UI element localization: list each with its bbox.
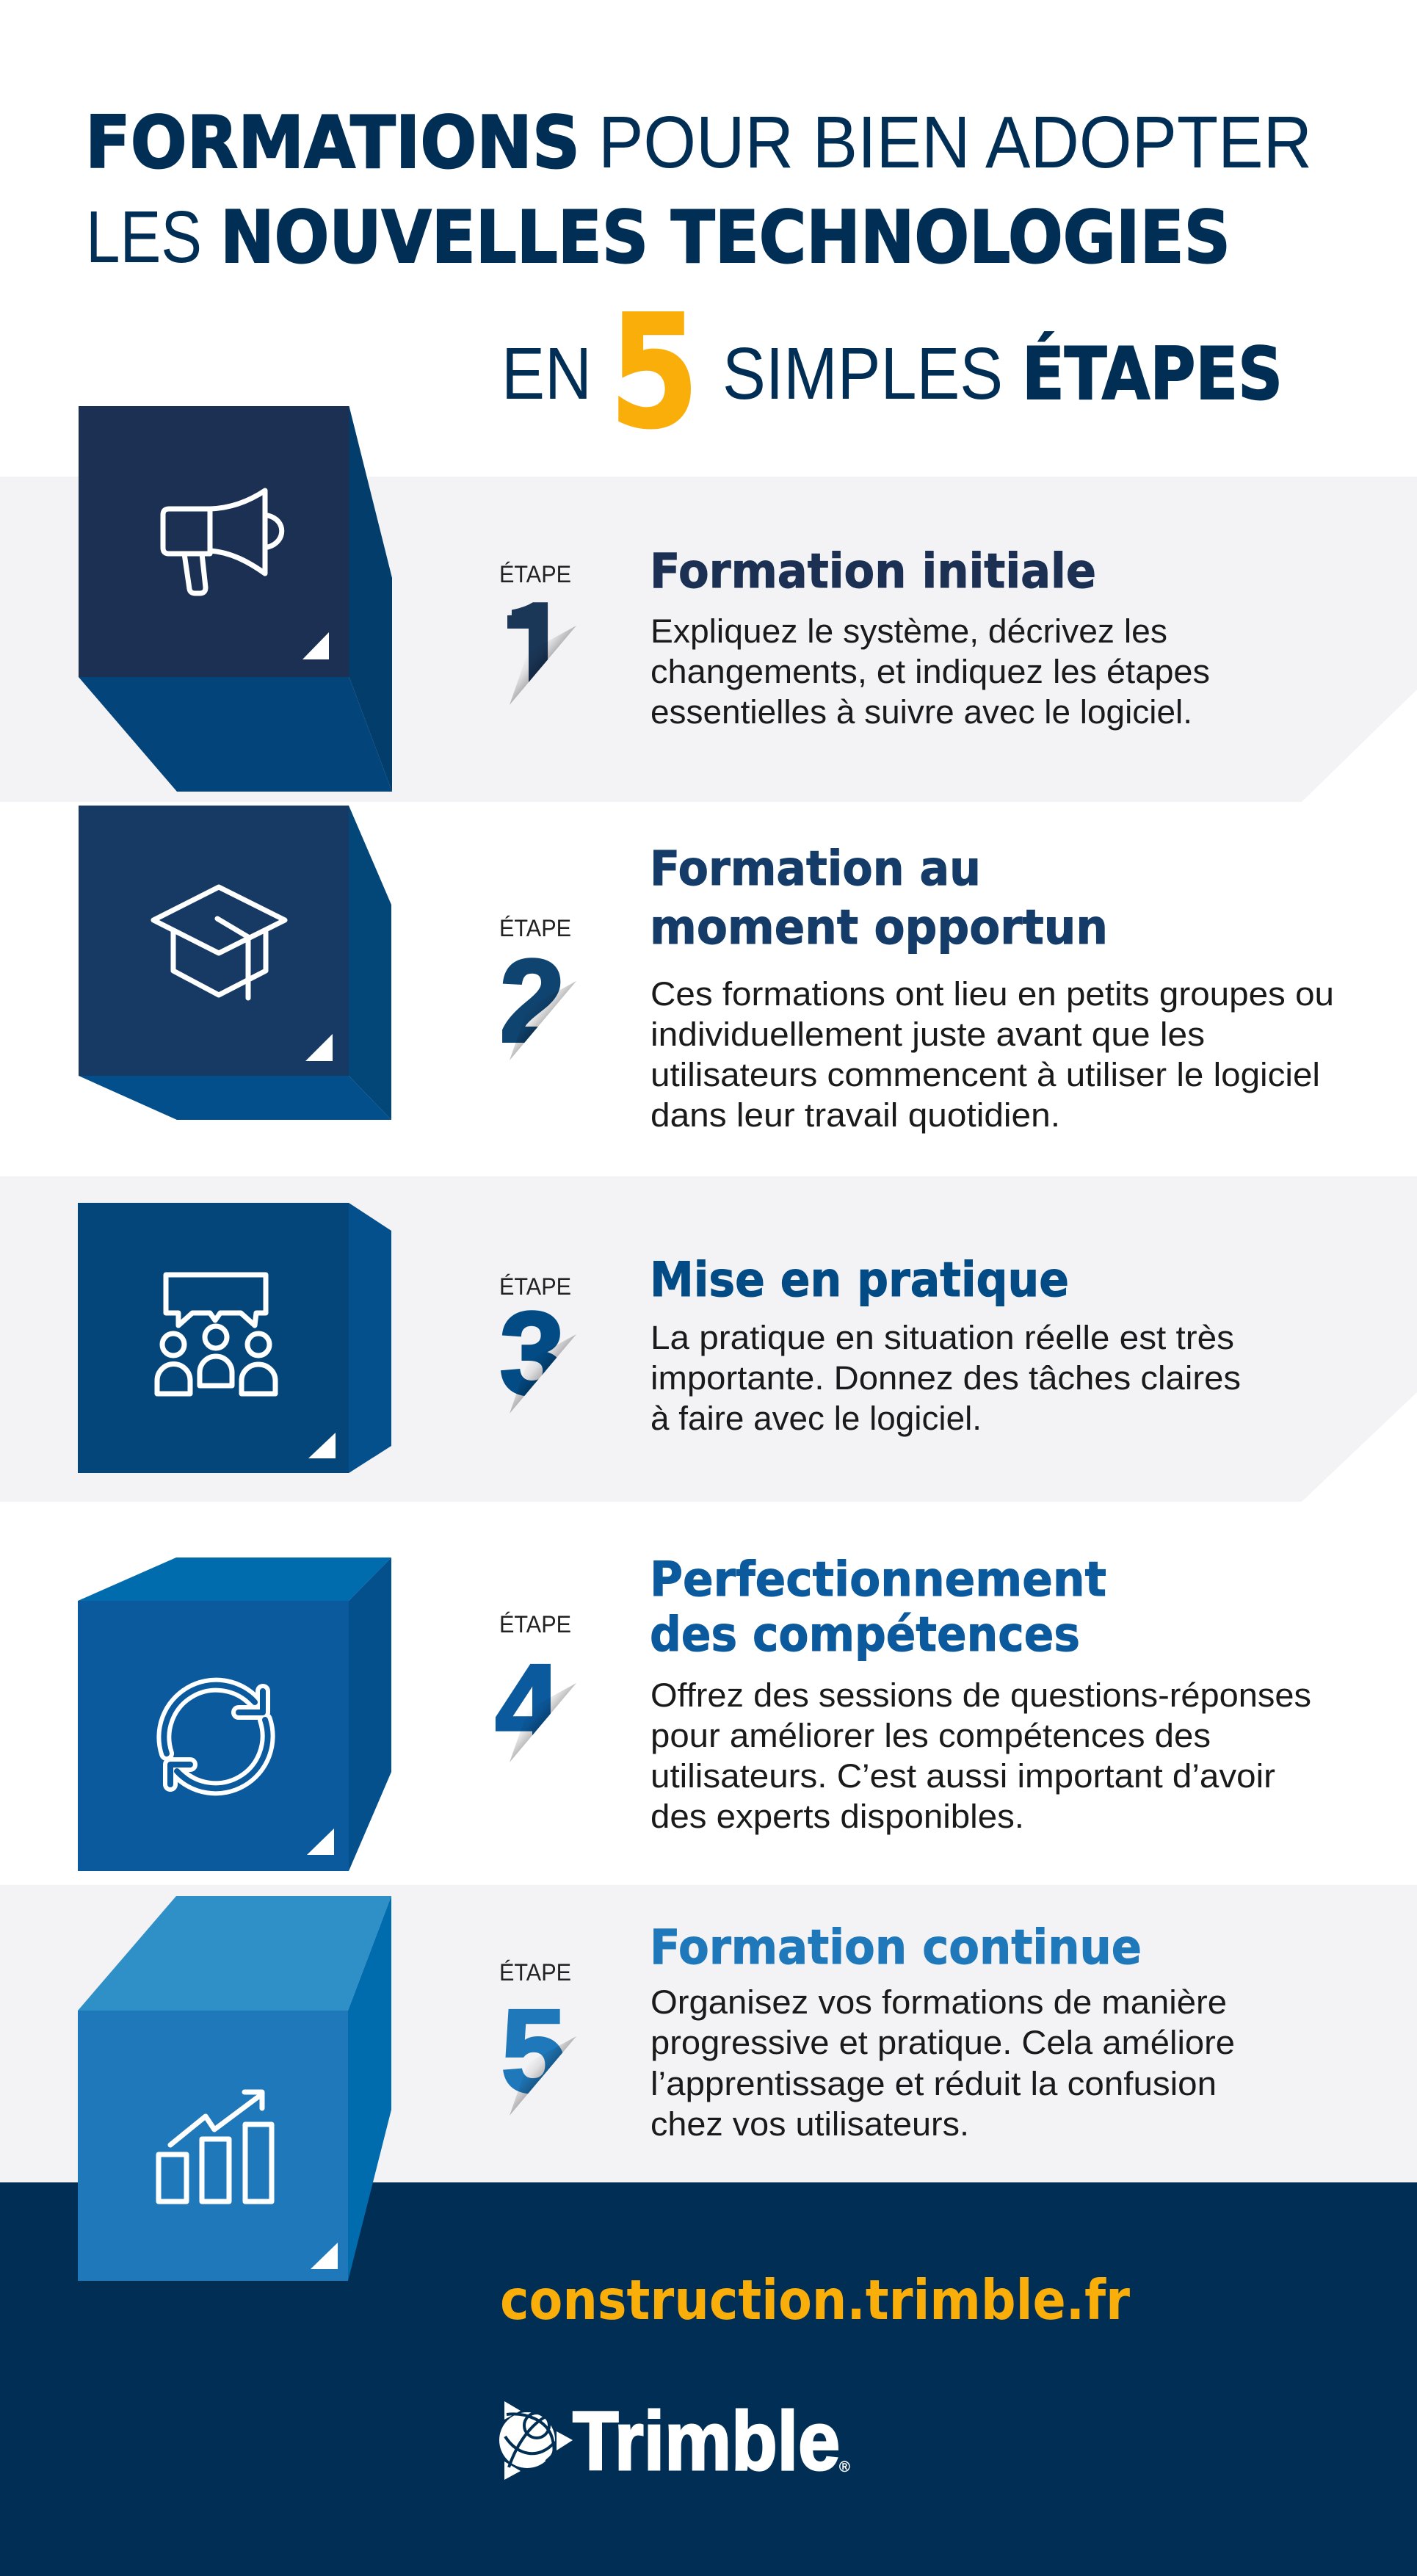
step 4 text: utilisateurs. C’est aussi important d’avoir: [650, 1757, 1275, 1795]
logo: Trimble: ®: [839, 2459, 850, 2475]
cube 5: [78, 1896, 391, 2281]
cube 2: [79, 806, 391, 1120]
step 4 marker: 4: [496, 1640, 561, 1771]
step 5 marker: ÉTAPE: [499, 1959, 571, 1986]
step 4 marker: ÉTAPE: [499, 1611, 571, 1638]
step 2 text: dans leur travail quotidien.: [650, 1096, 1060, 1134]
website link: construction.trimble.fr: [500, 2268, 1130, 2332]
step 2 marker: ÉTAPE: [499, 915, 571, 941]
title: FORMATIONS: [85, 101, 580, 185]
step 3 text: Mise en pratique: [650, 1253, 1069, 1308]
step 1 marker: ÉTAPE: [499, 561, 571, 587]
step 5 text: chez vos utilisateurs.: [650, 2105, 969, 2143]
cube 4: [78, 1557, 391, 1871]
title: SIMPLES: [722, 333, 1003, 415]
band: step 1 background: [0, 477, 1417, 802]
step 3 marker: 3: [500, 1287, 565, 1419]
title: LES: [86, 196, 202, 278]
footer background: [0, 2182, 1417, 2576]
step 2 text: Formation au: [650, 842, 981, 897]
logo: Trimble: Trimble: [573, 2395, 840, 2487]
step 2 text: individuellement juste avant que les: [650, 1016, 1205, 1053]
step 4 text: des experts disponibles.: [650, 1798, 1024, 1835]
step 1 marker: 1: [501, 554, 569, 721]
step 5 text: l’apprentissage et réduit la confusion: [650, 2065, 1217, 2102]
step 5 text: Formation continue: [650, 1920, 1142, 1975]
step 3 marker: ÉTAPE: [499, 1273, 571, 1300]
cube 1: [79, 406, 392, 792]
title: 5: [609, 281, 699, 463]
title: POUR BIEN ADOPTER: [598, 101, 1312, 184]
icon: people with speech bubble: [157, 1275, 275, 1394]
title: [85, 101, 1312, 463]
step 1 text: Expliquez le système, décrivez les: [650, 612, 1167, 650]
step 4 marker: [496, 1611, 576, 1771]
step 2 text: utilisateurs commencent à utiliser le logiciel: [650, 1056, 1320, 1093]
title: EN: [501, 333, 592, 415]
step 4 text: pour améliorer les compétences des: [650, 1717, 1211, 1754]
band: step 3 background: [0, 1176, 1417, 1502]
step 4 text: des compétences: [650, 1607, 1080, 1663]
step 2 text: Ces formations ont lieu en petits groupes ou: [650, 975, 1334, 1013]
band: step 5 background: [0, 1885, 1417, 2182]
title: NOUVELLES TECHNOLOGIES: [220, 196, 1231, 280]
step 3 text: à faire avec le logiciel.: [650, 1400, 982, 1437]
icon: graduation cap: [153, 887, 285, 998]
step 5 text: [650, 1920, 1235, 2143]
step 3 text: La pratique en situation réelle est très: [650, 1319, 1234, 1356]
step 4 text: Perfectionnement: [650, 1552, 1106, 1607]
title: ÉTAPES: [1022, 332, 1283, 416]
step 5 text: Organisez vos formations de manière: [650, 1983, 1227, 2021]
step 5 text: progressive et pratique. Cela améliore: [650, 2024, 1235, 2061]
step 1 text: essentielles à suivre avec le logiciel.: [650, 693, 1192, 731]
step 1 text: changements, et indiquez les étapes: [650, 653, 1210, 690]
step 2 text: [650, 842, 1334, 1134]
step 2 marker: 2: [500, 935, 565, 1066]
step 5 marker: 5: [501, 1985, 566, 2116]
step 3 text: importante. Donnez des tâches claires: [650, 1359, 1241, 1397]
step 1 text: [650, 544, 1210, 731]
cube 3: [78, 1203, 391, 1473]
step 1 text: Formation initiale: [650, 544, 1096, 599]
step 3 text: [650, 1253, 1241, 1437]
icon: rising bar chart: [159, 2092, 272, 2201]
icon: megaphone: [163, 491, 282, 593]
step 4 text: Offrez des sessions de questions-réponses: [650, 1676, 1311, 1714]
icon: refresh arrows: [164, 1685, 268, 1788]
step 2 text: moment opportun: [650, 900, 1108, 955]
step 4 text: [650, 1552, 1311, 1835]
